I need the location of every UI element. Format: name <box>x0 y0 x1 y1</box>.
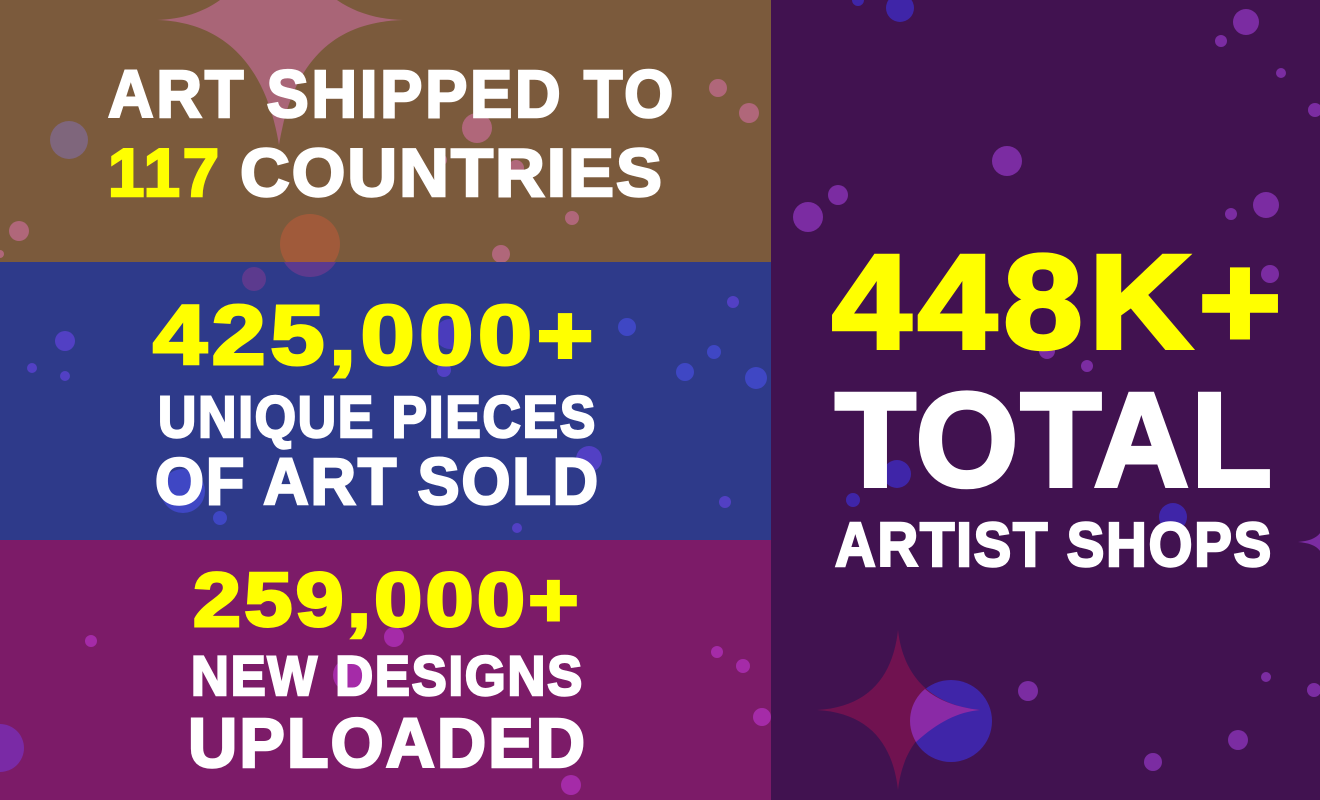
text: new designs: NEW DESIGNS <box>191 644 584 707</box>
heading: 117 countries: 117 <box>108 135 222 211</box>
panel: new designs <box>0 540 771 800</box>
panel: unique pieces <box>0 262 771 540</box>
text: unique pieces: UNIQUE PIECES <box>158 385 597 450</box>
stat: 425,000+: 425,000+ <box>153 288 598 382</box>
stat: 448K+: 448K+ <box>832 228 1288 377</box>
decorative: orange circle across panels <box>280 214 340 277</box>
icon: star and circle overlap <box>910 689 980 742</box>
icon: large star top <box>157 0 403 145</box>
heading: 117 countries: COUNTRIES <box>240 135 664 211</box>
panel: total artist shops <box>771 0 1320 800</box>
text: total: TOTAL <box>835 366 1274 515</box>
decorative dots: purple panel <box>793 0 1320 771</box>
text: of art sold: OF ART SOLD <box>155 444 600 518</box>
text: uploaded: UPLOADED <box>188 704 587 782</box>
decorative dots: magenta panel <box>0 627 771 795</box>
icon: large star bottom <box>817 630 980 790</box>
text: artist shops: ARTIST SHOPS <box>835 511 1273 580</box>
decorative dots: brown panel <box>0 79 759 263</box>
panel: art shipped <box>0 0 771 263</box>
decorative dots: blue panel <box>27 267 767 533</box>
heading: art shipped to: ART SHIPPED TO <box>108 57 676 132</box>
icon: blue circle <box>910 680 992 762</box>
stat: 259,000+: 259,000+ <box>193 558 582 643</box>
icon: star right edge <box>1298 530 1320 554</box>
